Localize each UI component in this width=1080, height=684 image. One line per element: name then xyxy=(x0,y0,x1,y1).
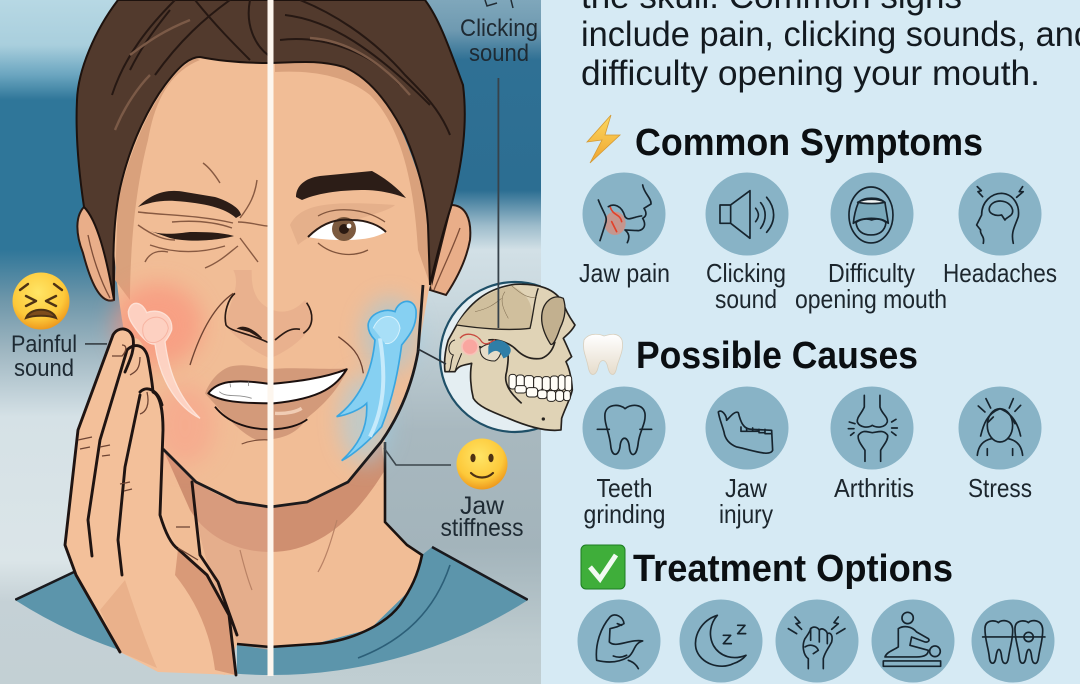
neck xyxy=(140,440,422,675)
heading: Common Symptoms xyxy=(635,122,983,164)
left panel blurred clinic background xyxy=(0,0,541,684)
section: common symptoms xyxy=(579,115,1057,314)
nose and mouth xyxy=(190,270,363,444)
callout: painful sound: Painful xyxy=(11,331,77,358)
hand on jaw xyxy=(65,329,237,675)
treatment: stress relief fist xyxy=(776,600,858,682)
icon: tooth xyxy=(583,334,623,374)
cause: jaw injury: Jaw xyxy=(725,473,767,503)
section: treatment options xyxy=(578,545,1054,682)
ears xyxy=(77,205,470,301)
left pained eye and brow xyxy=(138,163,268,268)
callout: painful sound xyxy=(11,272,107,382)
callout: jaw stiffness: stiffness xyxy=(440,514,524,542)
heading: Treatment Options xyxy=(633,548,953,590)
cause: jaw injury xyxy=(706,386,788,529)
heading: Possible Causes xyxy=(636,335,918,377)
symptom: jaw pain xyxy=(579,172,670,288)
callout: clicking sound xyxy=(460,0,538,67)
intro text xyxy=(581,0,1080,93)
inset circle xyxy=(438,280,541,434)
illustration: split face xyxy=(15,0,528,684)
symptom: clicking sound: Clicking xyxy=(706,258,786,288)
centre divider xyxy=(268,0,274,676)
pain glow: left jaw xyxy=(113,283,215,465)
treatment: sleep xyxy=(680,600,762,682)
cause: arthritis xyxy=(830,386,914,503)
symptom: difficulty opening mouth: Difficulty xyxy=(828,258,915,288)
icon: check mark xyxy=(581,545,625,589)
emoji: pained face xyxy=(12,272,70,330)
skull inset xyxy=(418,282,590,432)
cause: jaw injury: injury xyxy=(719,499,773,529)
treatment: massage therapy xyxy=(872,600,954,682)
symptom: clicking sound: sound xyxy=(715,284,777,314)
right eye and brow xyxy=(296,171,406,254)
intro text: difficulty opening your mouth. xyxy=(581,54,1040,93)
cause: teeth grinding xyxy=(582,386,666,529)
glow: right jaw xyxy=(340,297,418,465)
callout: clicking sound: sound xyxy=(469,40,529,67)
hair xyxy=(77,0,465,300)
cause: stress xyxy=(958,386,1042,503)
symptom: jaw pain: Jaw pain xyxy=(579,258,670,288)
skull pointer line xyxy=(418,349,446,364)
healthy jaw bone (blue) xyxy=(337,301,416,461)
treatment: jaw exercises xyxy=(578,600,660,682)
treatment: dental splint xyxy=(972,600,1054,682)
clicking sound pointer line xyxy=(498,78,499,328)
jaw outline xyxy=(163,285,423,507)
symptom: headaches: Headaches xyxy=(943,258,1057,288)
callout: painful sound: sound xyxy=(14,355,74,382)
callout: jaw stiffness xyxy=(384,438,524,542)
shirt xyxy=(15,547,528,684)
callout: jaw stiffness: Jaw xyxy=(460,492,505,520)
symptom: headaches xyxy=(943,172,1057,288)
symptom: clicking sound xyxy=(706,172,788,314)
face xyxy=(113,55,430,507)
cause: arthritis: Arthritis xyxy=(834,473,914,503)
icon: lightning bolt xyxy=(587,115,620,163)
callout: clicking sound: Clicking xyxy=(460,15,538,42)
painful jaw bone (red) xyxy=(128,303,200,418)
symptom: difficulty opening mouth xyxy=(795,172,947,314)
emoji: smiling face xyxy=(456,438,508,490)
section: possible causes xyxy=(582,334,1042,529)
cause: teeth grinding: Teeth xyxy=(596,473,652,503)
symptom: difficulty opening mouth: opening mouth xyxy=(795,284,947,314)
forehead and cheek shading xyxy=(115,58,432,300)
cause: stress: Stress xyxy=(968,473,1032,503)
right panel background xyxy=(540,0,1080,684)
cause: teeth grinding: grinding xyxy=(584,499,666,529)
skull drawing xyxy=(445,284,575,430)
